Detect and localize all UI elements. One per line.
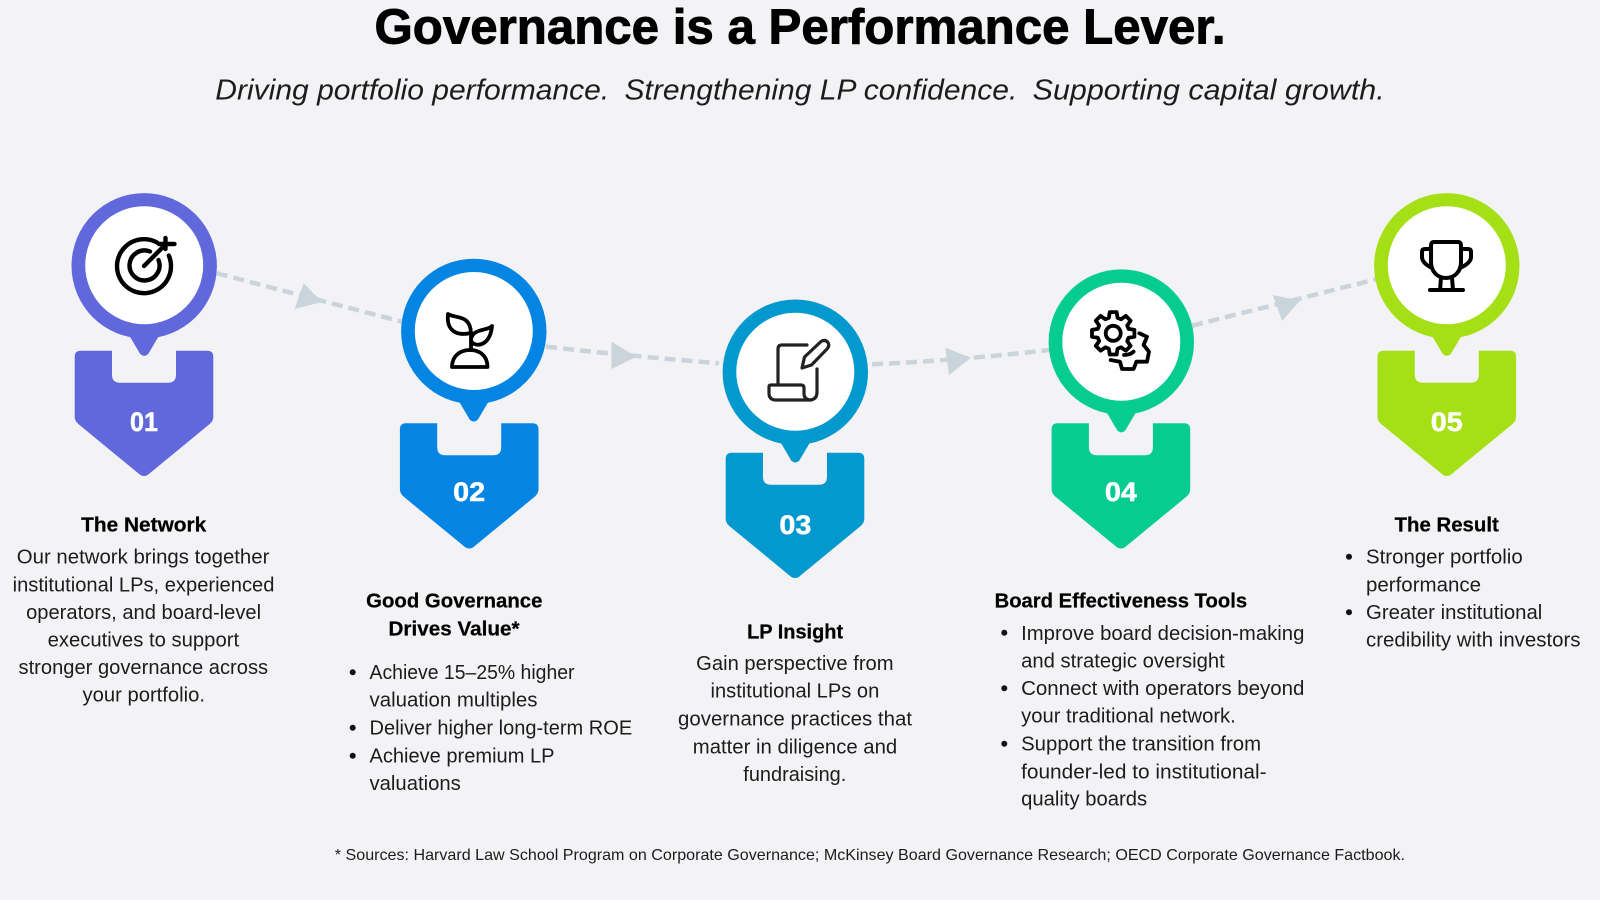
icon: gears [1092, 312, 1149, 369]
subtitle: Supporting capital growth. [1033, 74, 1385, 106]
body: The Network: stronger governance across [18, 657, 268, 679]
body: LP Insight: governance practices that [678, 709, 912, 731]
number 02: 02 [453, 477, 485, 507]
number 03: 03 [779, 510, 811, 540]
bullet list: tools: Support the transition from [1021, 734, 1261, 756]
subtitle: Strengthening LP confidence. [624, 74, 1017, 106]
panel: step 01 graphic [72, 193, 217, 476]
icon: trophy [1422, 242, 1471, 290]
subtitle [215, 74, 1385, 106]
panel: step 05 graphic [1374, 193, 1520, 476]
heading: The Result: The Result [1395, 515, 1499, 537]
bullet list: value: valuation multiples [370, 690, 538, 712]
arrow: 03 to 04 [872, 348, 1049, 375]
bullet list: value: valuations [370, 773, 461, 795]
bullet list: tools: founder-led to institutional- [1021, 761, 1267, 783]
heading: LP Insight: LP Insight [747, 621, 843, 643]
bullet list: tools [1001, 623, 1304, 811]
subtitle: Driving portfolio performance. [215, 74, 609, 106]
bullet list: tools: your traditional network. [1021, 705, 1236, 727]
text block: Good Governance Drives Value [350, 590, 632, 795]
shield 03 [726, 453, 864, 578]
text block: LP Insight [678, 621, 912, 786]
panel: step 04 graphic [1049, 269, 1194, 549]
shield 01 [75, 351, 213, 476]
arrow: 04 to 05 [1192, 279, 1376, 326]
bullet list: tools: Connect with operators beyond [1021, 678, 1304, 700]
panel: step 02 graphic [400, 259, 546, 549]
body: The Network: your portfolio. [82, 685, 205, 707]
arrow: 02 to 03 [546, 342, 719, 369]
body: The Network [13, 546, 274, 707]
heading: Good Governance Drives Value: Drives Value* [388, 619, 520, 641]
icon: target [117, 238, 174, 293]
number 05: 05 [1431, 407, 1463, 437]
pin 01 [72, 193, 217, 356]
body: LP Insight: matter in diligence and [693, 736, 897, 758]
text block: Board Effectiveness Tools [995, 591, 1304, 811]
panel: step 03 graphic [723, 300, 868, 578]
body: The Network: Our network brings together [17, 546, 270, 568]
footnote: * Sources: Harvard Law School Program on Corporate Governance; McKinsey Board Governance Research; OECD Corporate Governance Factbook. [335, 847, 1405, 864]
title: Governance is a Performance Lever. [374, 0, 1226, 54]
body: The Network: institutional LPs, experienced [13, 574, 274, 596]
bullet list: value: Deliver higher long-term ROE [370, 718, 632, 740]
bullet list: result [1346, 546, 1580, 652]
body: LP Insight [678, 653, 912, 786]
pin 04 [1049, 269, 1194, 432]
bullet list: result: Stronger portfolio [1366, 546, 1523, 568]
pin 03 [723, 300, 868, 462]
bullet list: result: Greater institutional [1366, 602, 1542, 624]
body: LP Insight: Gain perspective from [696, 653, 894, 675]
shield 04 [1052, 423, 1190, 549]
bullet list: value: Achieve 15–25% higher [370, 662, 575, 684]
heading: Good Governance Drives Value: Good Governance [366, 590, 542, 612]
body: LP Insight: institutional LPs on [710, 680, 879, 702]
heading: Good Governance Drives Value [366, 590, 542, 641]
bullet list: result: performance [1366, 575, 1481, 597]
bullet list: value [350, 662, 632, 795]
bullet list: tools: quality boards [1021, 789, 1147, 811]
arrow: 01 to 02 [217, 273, 402, 322]
number 01: 01 [130, 407, 158, 437]
text block: The Result [1346, 515, 1580, 652]
body: LP Insight: fundraising. [743, 764, 846, 786]
pin 02 [401, 259, 546, 422]
bullet list: value: Achieve premium LP [370, 745, 554, 767]
shield 02 [400, 423, 538, 549]
bullet list: tools: Improve board decision-making [1021, 623, 1304, 645]
text block: The Network [13, 515, 274, 707]
heading: Board Effectiveness Tools: Board Effectiveness Tools [995, 591, 1247, 613]
shield 05 [1378, 351, 1516, 476]
icon: sprout [448, 314, 492, 367]
number 04: 04 [1105, 477, 1137, 507]
bullet list: result: credibility with investors [1366, 630, 1580, 652]
bullet list: tools: and strategic oversight [1021, 650, 1225, 672]
heading: The Network: The Network [81, 515, 207, 537]
pin 05 [1374, 193, 1520, 356]
icon: scroll and quill [769, 340, 829, 400]
body: The Network: executives to support [48, 630, 240, 652]
body: The Network: operators, and board-level [26, 602, 261, 624]
